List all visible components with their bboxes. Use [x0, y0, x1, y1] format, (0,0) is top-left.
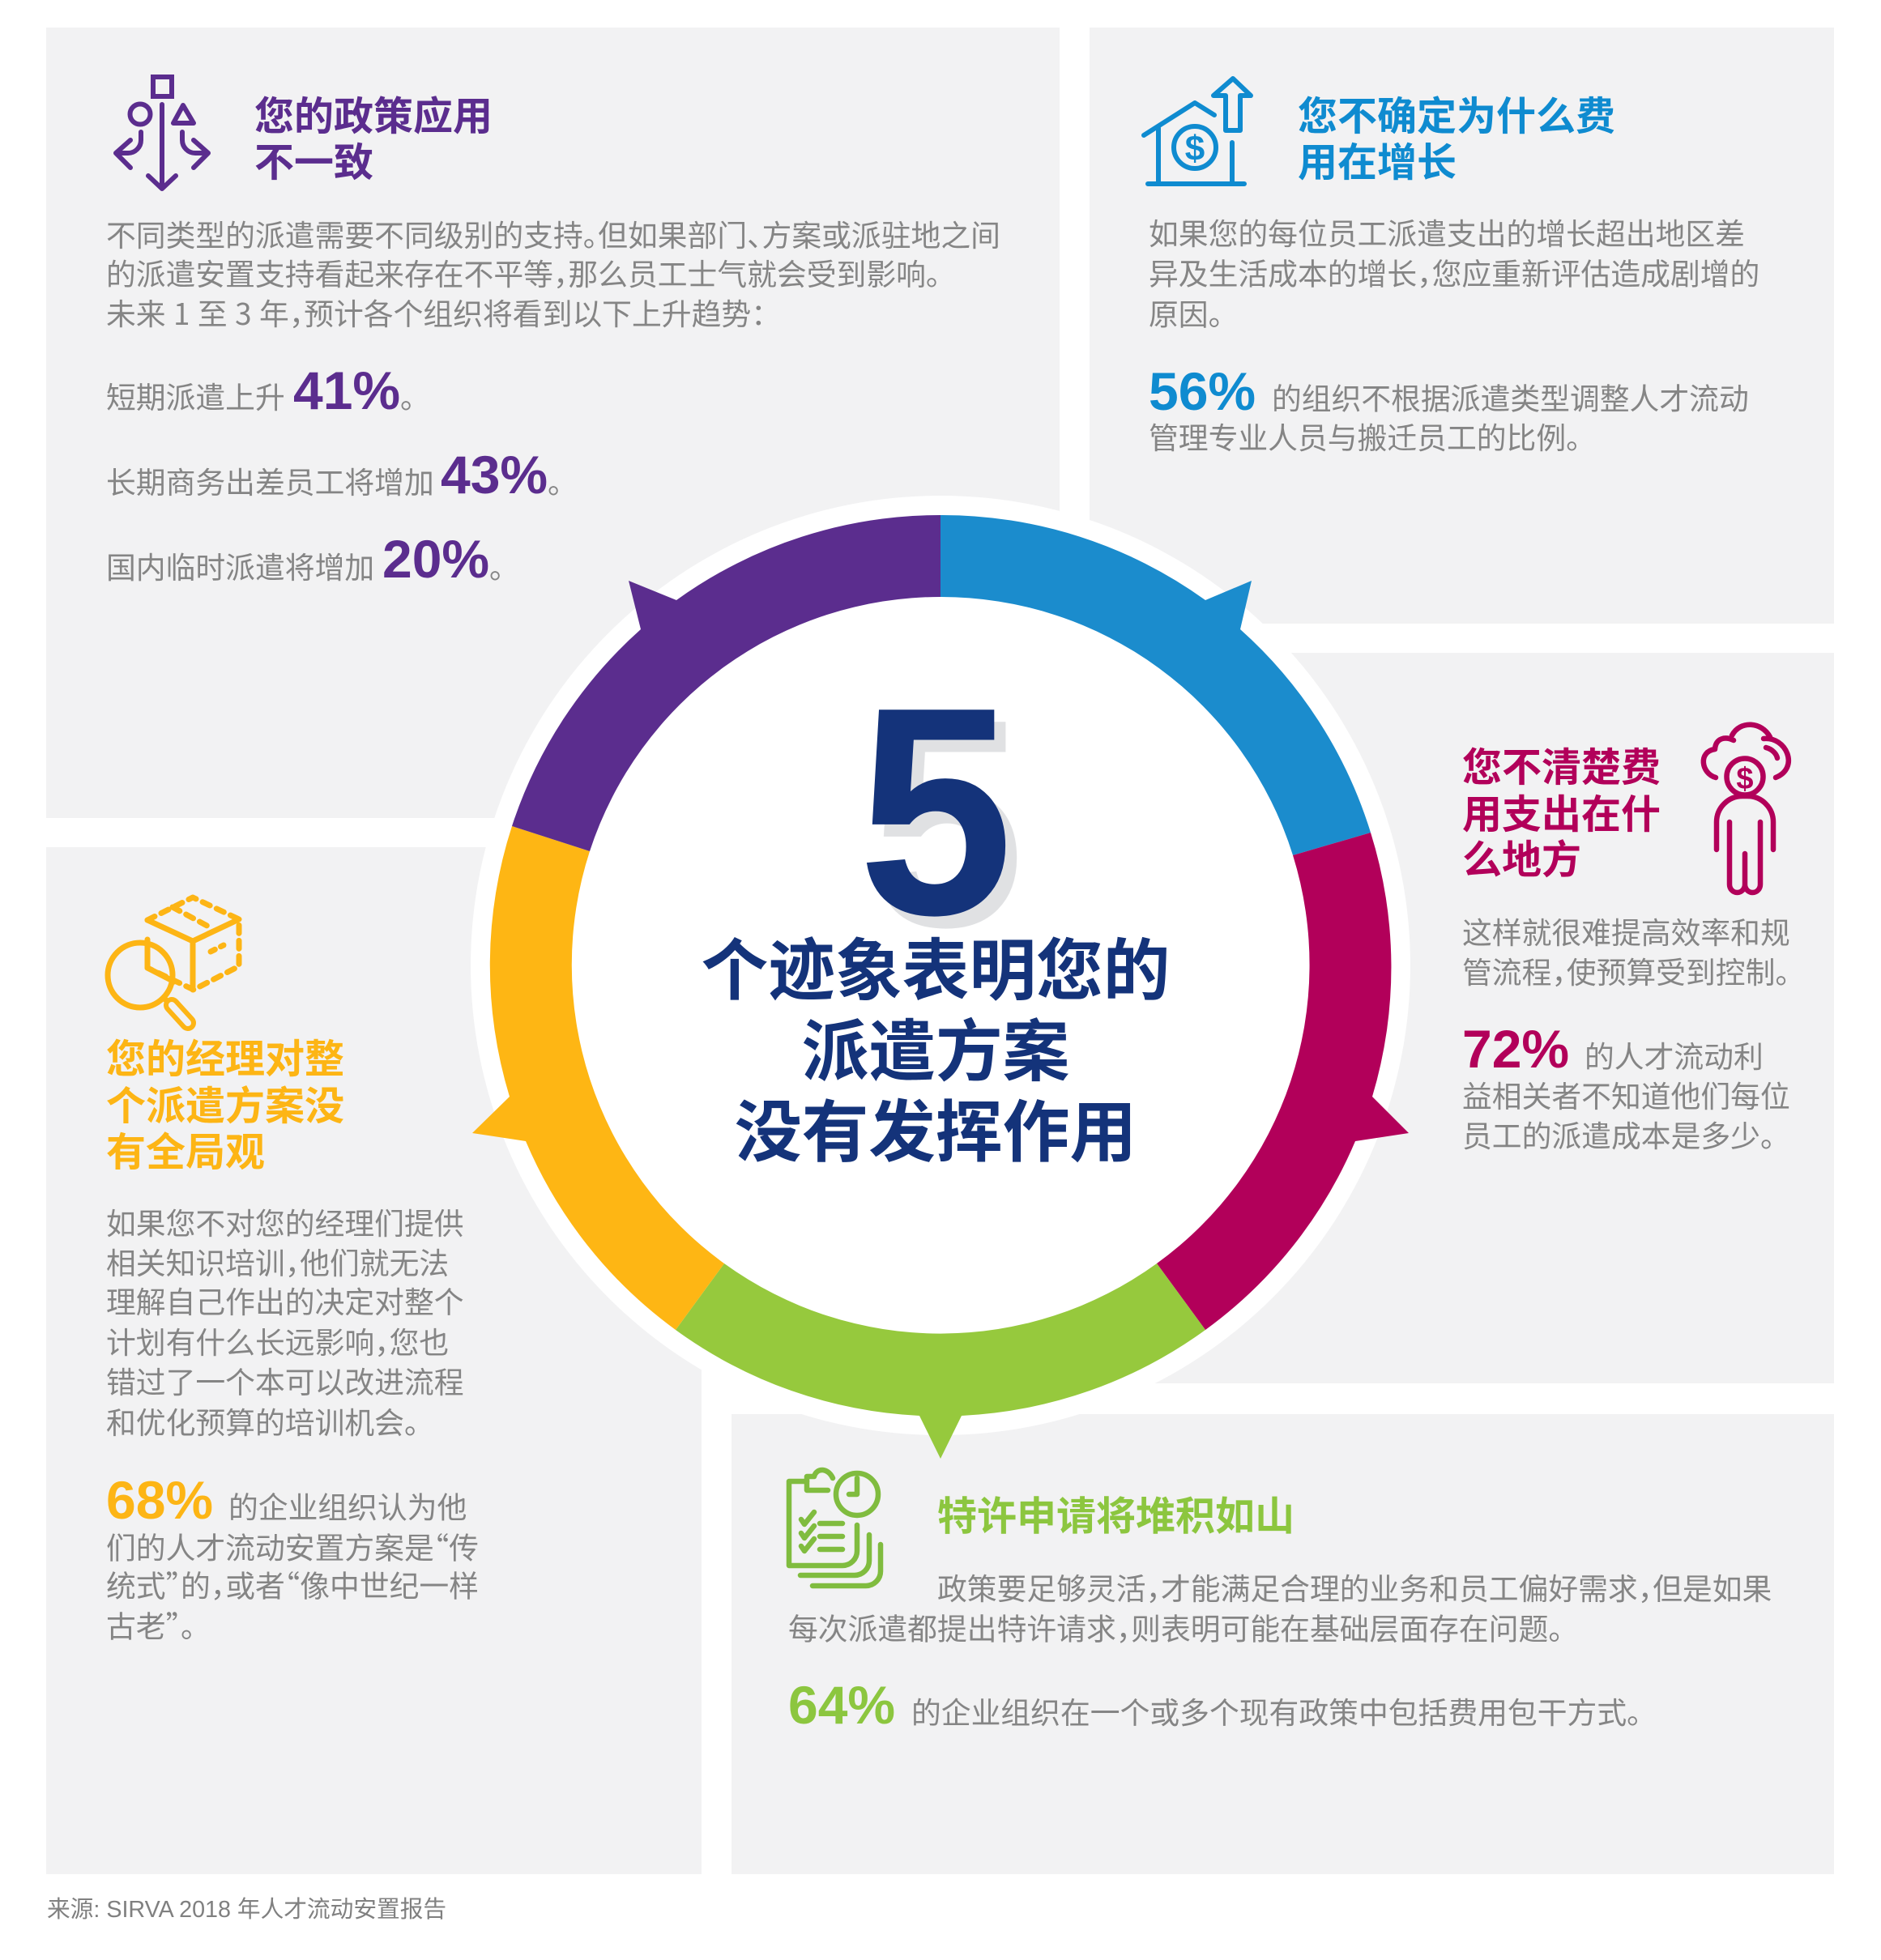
stat: 72%: 员工的派遣成本是多少。: [1462, 1112, 1790, 1156]
source note: 来源: SIRVA 2018 年人才流动安置报告: [47, 1897, 446, 1923]
text: description: 这样就很难提高效率和规: [1462, 909, 1790, 952]
central title: 派遣方案: [802, 998, 1069, 1095]
stat: domestic temporary assignments 20%: [106, 529, 519, 589]
central title: 个迹象表明您的: [702, 917, 1170, 1014]
stat: domestic temporary assignments 20%: 。: [489, 543, 519, 587]
stat: 64%: [788, 1675, 1657, 1735]
heading: purple: 不一致: [254, 131, 373, 188]
heading: crimson: 用支出在什: [1462, 782, 1661, 841]
ring: five-segment circle: [471, 496, 1410, 1459]
panel: exception requests pile up: [732, 1414, 1834, 1874]
heading: crimson: 么地方: [1462, 828, 1581, 886]
stat: domestic temporary assignments 20%: 20%: [382, 529, 489, 589]
heading: purple: [254, 84, 493, 188]
segment: blue: [940, 515, 1371, 855]
text: description: 如果您的每位员工派遣支出的增长超出地区差: [1149, 210, 1745, 254]
icon: person with dollar head and cloud: $: [1736, 762, 1754, 796]
text: description: 政策要足够灵活，才能满足合理的业务和员工偏好需求，但是如果: [937, 1565, 1772, 1608]
stat: 68%: 古老”。: [106, 1602, 211, 1646]
text: intro: 未来 1 至 3 年，预计各个组织将看到以下上升趋势：: [106, 290, 766, 334]
text: description: 和优化预算的培训机会。: [106, 1399, 434, 1442]
panel: costs growing without explanation: [1090, 28, 1834, 624]
icon: house with dollar and up arrow: [1144, 79, 1251, 184]
text: description: 每次派遣都提出特许请求，则表明可能在基础层面存在问题。: [788, 1605, 1578, 1649]
stat: domestic temporary assignments 20%: 国内临时派遣将增加: [106, 543, 374, 587]
heading: blue: [1298, 84, 1615, 188]
text: description: [1149, 210, 1759, 334]
icon: person with dollar head and cloud: [1704, 725, 1789, 893]
heading: amber: 有全局观: [106, 1121, 265, 1178]
numeral 5: 5: [858, 646, 1013, 977]
stat: 68%: 们的人才流动安置方案是“传: [106, 1524, 479, 1568]
stat: 68%: [106, 1470, 479, 1646]
text: description: 管流程，使预算受到控制。: [1462, 948, 1805, 992]
heading: blue: 您不确定为什么费: [1298, 84, 1615, 143]
stat: long-term business travellers 43%: 。: [548, 458, 578, 502]
heading: amber: [106, 1027, 344, 1178]
stat: short-term assignments 41%: 短期派遣上升: [106, 373, 285, 417]
central title: [702, 917, 1170, 1175]
panel: inconsistent policy application: [46, 28, 1060, 818]
heading: crimson: 您不清楚费: [1462, 735, 1661, 794]
segment: purple: [512, 515, 940, 851]
stat: long-term business travellers 43%: [106, 445, 578, 505]
heading: purple: 您的政策应用: [254, 84, 493, 143]
icon: house with dollar and up arrow: $: [1185, 129, 1205, 168]
segment: crimson: [1157, 833, 1409, 1330]
icon: shapes with diverging arrows: [116, 77, 208, 189]
text: description: [106, 1199, 464, 1442]
stat: 68%: 的企业组织认为他: [228, 1484, 467, 1528]
text: intro: [106, 211, 1000, 334]
stat: 68%: 68%: [106, 1470, 213, 1530]
text: intro: 的派遣安置支持看起来存在不平等，那么员工士气就会受到影响。: [106, 250, 956, 294]
stat: 72%: 的人才流动利: [1585, 1033, 1764, 1076]
heading: amber: 您的经理对整: [106, 1027, 344, 1085]
stat: 56%: [1149, 361, 1749, 458]
heading: amber: 个派遣方案没: [106, 1074, 344, 1132]
stat: 56%: 管理专业人员与搬迁员工的比例。: [1149, 414, 1596, 458]
segment: amber: [472, 826, 724, 1330]
text: description: 相关知识培训，他们就无法: [106, 1239, 449, 1283]
stat: 72%: 72%: [1462, 1019, 1569, 1079]
stat: short-term assignments 41%: 41%: [293, 360, 400, 420]
stat: 56%: 56%: [1149, 361, 1256, 421]
stat: 68%: 统式”的，或者“像中世纪一样: [106, 1562, 479, 1605]
stat: long-term business travellers 43%: 长期商务出差员工将增加: [106, 458, 434, 502]
panel: unclear where the spend goes: [1134, 653, 1834, 1383]
text: description: 如果您不对您的经理们提供: [106, 1199, 464, 1243]
text: intro: 不同类型的派遣需要不同级别的支持。但如果部门、方案或派驻地之间: [106, 211, 1000, 255]
text: description: 原因。: [1149, 290, 1238, 334]
stat: 64%: 的企业组织在一个或多个现有政策中包括费用包干方式。: [911, 1689, 1657, 1732]
text: description: 错过了一个本可以改进流程: [106, 1358, 464, 1402]
text: description: 计划有什么长远影响，您也: [106, 1319, 449, 1362]
panel: managers lack the big picture: [46, 847, 702, 1874]
stat: 72%: 益相关者不知道他们每位: [1462, 1072, 1790, 1116]
segment: green: [676, 1263, 1205, 1459]
heading: blue: 用在增长: [1298, 131, 1457, 188]
stat: 72%: [1462, 1019, 1790, 1156]
heading: green: 特许申请将堆积如山: [937, 1485, 1295, 1542]
stat: short-term assignments 41%: 。: [400, 373, 430, 417]
text: description: [1462, 909, 1805, 992]
stat: 64%: 64%: [788, 1675, 895, 1735]
stat: 56%: 的组织不根据派遣类型调整人才流动: [1272, 374, 1749, 418]
icon: dashed box under magnifying glass: [108, 897, 239, 1023]
text: description: 理解自己作出的决定对整个: [106, 1278, 464, 1322]
stat: short-term assignments 41%: [106, 360, 430, 420]
central title: 没有发挥作用: [735, 1078, 1137, 1175]
text: description: 异及生活成本的增长，您应重新评估造成剧增的: [1149, 249, 1759, 293]
icon: clipboard checklist with clock: [789, 1470, 881, 1586]
text: description: [788, 1565, 1772, 1649]
heading: crimson: [1462, 735, 1661, 886]
stat: long-term business travellers 43%: 43%: [441, 445, 548, 505]
